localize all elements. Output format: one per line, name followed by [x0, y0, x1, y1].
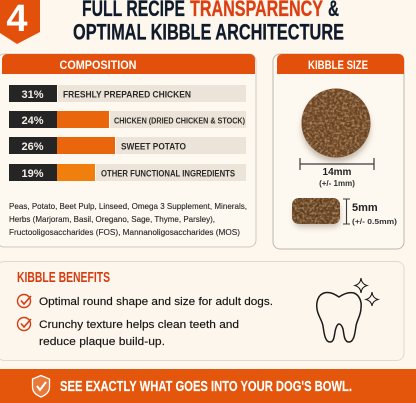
row: 24% chicken: [9, 111, 246, 128]
kibble size header: KIBBLE SIZE: [308, 60, 368, 72]
row: 24% chicken: 24%: [21, 115, 44, 127]
kibble top view: [302, 88, 370, 162]
width dimension: 14mm: [300, 158, 374, 188]
row: 31% freshly prepared chicken: 31%: [21, 89, 44, 101]
panel: composition: [0, 54, 256, 247]
benefit 2: reduce plaque build-up.: [39, 336, 165, 348]
height dimension: 5mm: [343, 199, 398, 226]
footer banner: [0, 369, 416, 403]
width dimension: 14mm: 14mm: [323, 167, 352, 178]
ingredient list: Herbs (Marjoram, Basil, Oregano, Sage, Thyme, Parsley),: [9, 214, 215, 224]
ingredient list: Fructooligosaccharides (FOS), Mannanoligosaccharides (MOS): [9, 227, 240, 237]
benefit 2: Crunchy texture helps clean teeth and: [39, 319, 239, 331]
benefit 1: Optimal round shape and size for adult dogs.: [39, 296, 273, 308]
row: 24% chicken: CHICKEN (DRIED CHICKEN & STOCK): [114, 116, 245, 126]
width dimension: 14mm: (+/- 1mm): [319, 179, 355, 188]
kibble side view: [292, 198, 340, 227]
ingredient list: [9, 201, 247, 237]
row: 26% sweet potato: SWEET POTATO: [121, 142, 186, 152]
icon: shield: [32, 376, 50, 397]
panel: kibble benefits: [0, 262, 404, 360]
row: 19% other functional ingredients: 19%: [21, 168, 44, 180]
ingredient list: Peas, Potato, Beet Pulp, Linseed, Omega 3 Supplement, Minerals,: [9, 201, 247, 211]
height dimension: 5mm: (+/- 0.5mm): [352, 217, 398, 226]
row: 31% freshly prepared chicken: FRESHLY PREPARED CHICKEN: [63, 90, 191, 100]
row: 19% other functional ingredients: OTHER FUNCTIONAL INGREDIENTS: [101, 168, 235, 178]
composition header: COMPOSITION: [60, 60, 136, 72]
benefit 2: [18, 318, 239, 348]
row: 26% sweet potato: 26%: [21, 141, 44, 153]
row: 31% freshly prepared chicken: [9, 85, 246, 102]
row: 26% sweet potato: [9, 137, 246, 154]
panel: kibble size: [273, 54, 404, 249]
title: [73, 0, 344, 44]
row: 19% other functional ingredients: [9, 164, 246, 181]
benefits heading: KIBBLE BENEFITS: [17, 270, 110, 286]
step number badge: [0, 0, 40, 44]
icon: tooth with sparkles: [317, 278, 378, 342]
kibble size header: [277, 54, 404, 74]
height dimension: 5mm: 5mm: [352, 202, 378, 214]
composition header: [2, 54, 255, 74]
